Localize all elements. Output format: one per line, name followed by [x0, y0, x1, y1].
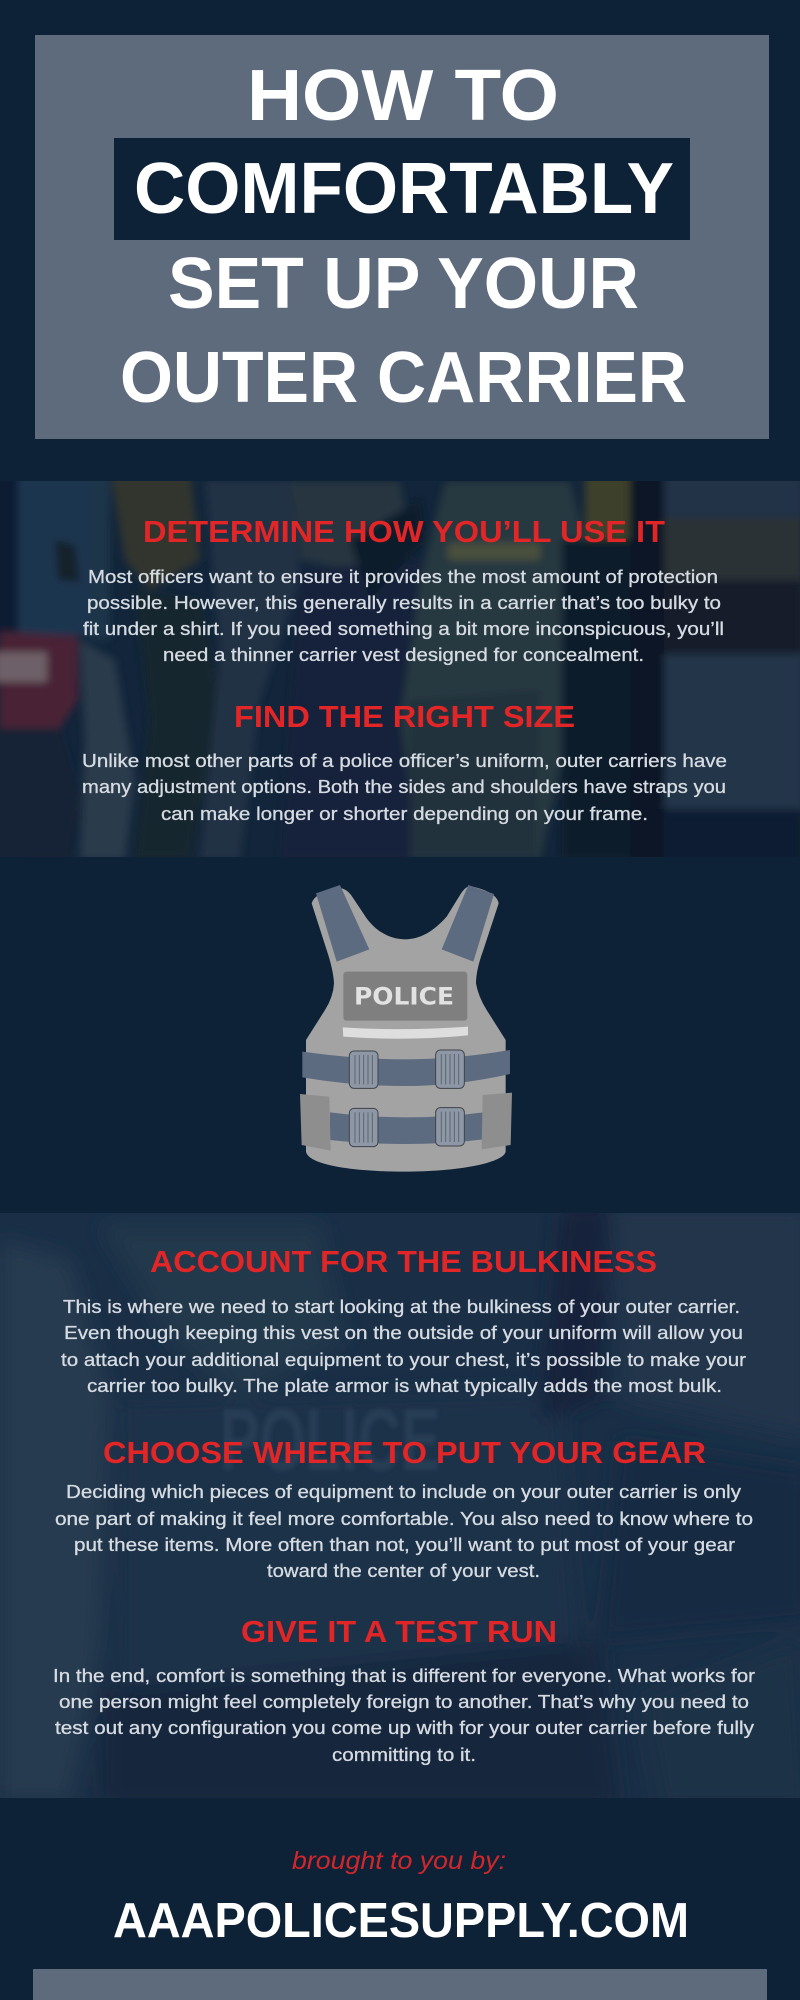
title panel — [35, 35, 769, 439]
text block: determine how you'll use it — [83, 567, 724, 665]
heading: give it a test run: GIVE IT A TEST RUN — [241, 1614, 557, 1649]
icon: police vest: POLICE — [354, 981, 454, 1010]
text block: choose where to put your gear: put these items. More often than not, you’ll want to put most of your gear — [74, 1535, 735, 1555]
text block: find the right size: many adjustment options. Both the sides and shoulders have straps you — [82, 777, 726, 797]
title: SET UP YOUR — [168, 244, 639, 324]
text block: find the right size — [82, 751, 727, 824]
panel: photo section with sheriff officer — [0, 470, 800, 870]
text block: find the right size: can make longer or shorter depending on your frame. — [161, 804, 648, 824]
heading: determine how you'll use it: DETERMINE HOW YOU’LL USE IT — [143, 514, 665, 549]
brought to you by: brought to you by: — [292, 1847, 506, 1875]
text block: choose where to put your gear — [55, 1482, 753, 1581]
heading: find the right size: FIND THE RIGHT SIZE — [234, 699, 575, 734]
title: COMFORTABLY — [134, 149, 674, 229]
title: OUTER CARRIER — [120, 338, 687, 418]
website name: AAAPOLICESUPPLY.COM — [113, 1894, 689, 1948]
title: HOW TO — [247, 56, 559, 136]
footer panel — [33, 1969, 767, 2000]
text block: choose where to put your gear: one part of making it feel more comfortable. You also need to know where to — [55, 1509, 753, 1529]
text block: account for the bulkiness: Even though keeping this vest on the outside of your uniform will allow you — [64, 1323, 743, 1343]
ghost police lettering on vest: POLICE — [220, 1390, 440, 1489]
icon: police vest — [300, 885, 512, 1172]
text block: give it a test run — [53, 1666, 755, 1765]
text block: find the right size: Unlike most other parts of a police officer’s uniform, outer carriers have — [82, 751, 727, 771]
text block: choose where to put your gear: Deciding which pieces of equipment to include on your outer carrier is only — [66, 1482, 741, 1502]
text block: determine how you'll use it: fit under a shirt. If you need something a bit more inconspicuous, you’ll — [83, 619, 724, 639]
title — [120, 56, 687, 418]
title highlight box — [114, 138, 690, 240]
panel: photo section with police vest — [0, 1205, 800, 1810]
text block: account for the bulkiness — [61, 1297, 746, 1396]
heading: account for the bulkiness: ACCOUNT FOR THE BULKINESS — [150, 1244, 657, 1279]
text block: give it a test run: In the end, comfort is something that is different for everyone. What works for — [53, 1666, 755, 1686]
text block: give it a test run: test out any configuration you come up with for your outer carrier before fully — [55, 1718, 754, 1738]
heading: choose where to put your gear: CHOOSE WHERE TO PUT YOUR GEAR — [103, 1435, 706, 1470]
text block: give it a test run: one person might feel completely foreign to another. That’s why you need to — [59, 1692, 749, 1712]
text block: determine how you'll use it: possible. However, this generally results in a carrier that’s too bulky to — [87, 593, 721, 613]
text block: determine how you'll use it: need a thinner carrier vest designed for concealment. — [163, 645, 644, 665]
text block: account for the bulkiness: to attach your additional equipment to your chest, it’s possible to make your — [61, 1350, 746, 1370]
text block: choose where to put your gear: toward the center of your vest. — [267, 1561, 540, 1581]
text block: give it a test run: committing to it. — [332, 1745, 476, 1765]
text block: determine how you'll use it: Most officers want to ensure it provides the most amount of protection — [88, 567, 718, 587]
text block: account for the bulkiness: carrier too bulky. The plate armor is what typically adds the most bulk. — [87, 1376, 722, 1396]
text block: account for the bulkiness: This is where we need to start looking at the bulkiness of your outer carrier. — [63, 1297, 740, 1317]
